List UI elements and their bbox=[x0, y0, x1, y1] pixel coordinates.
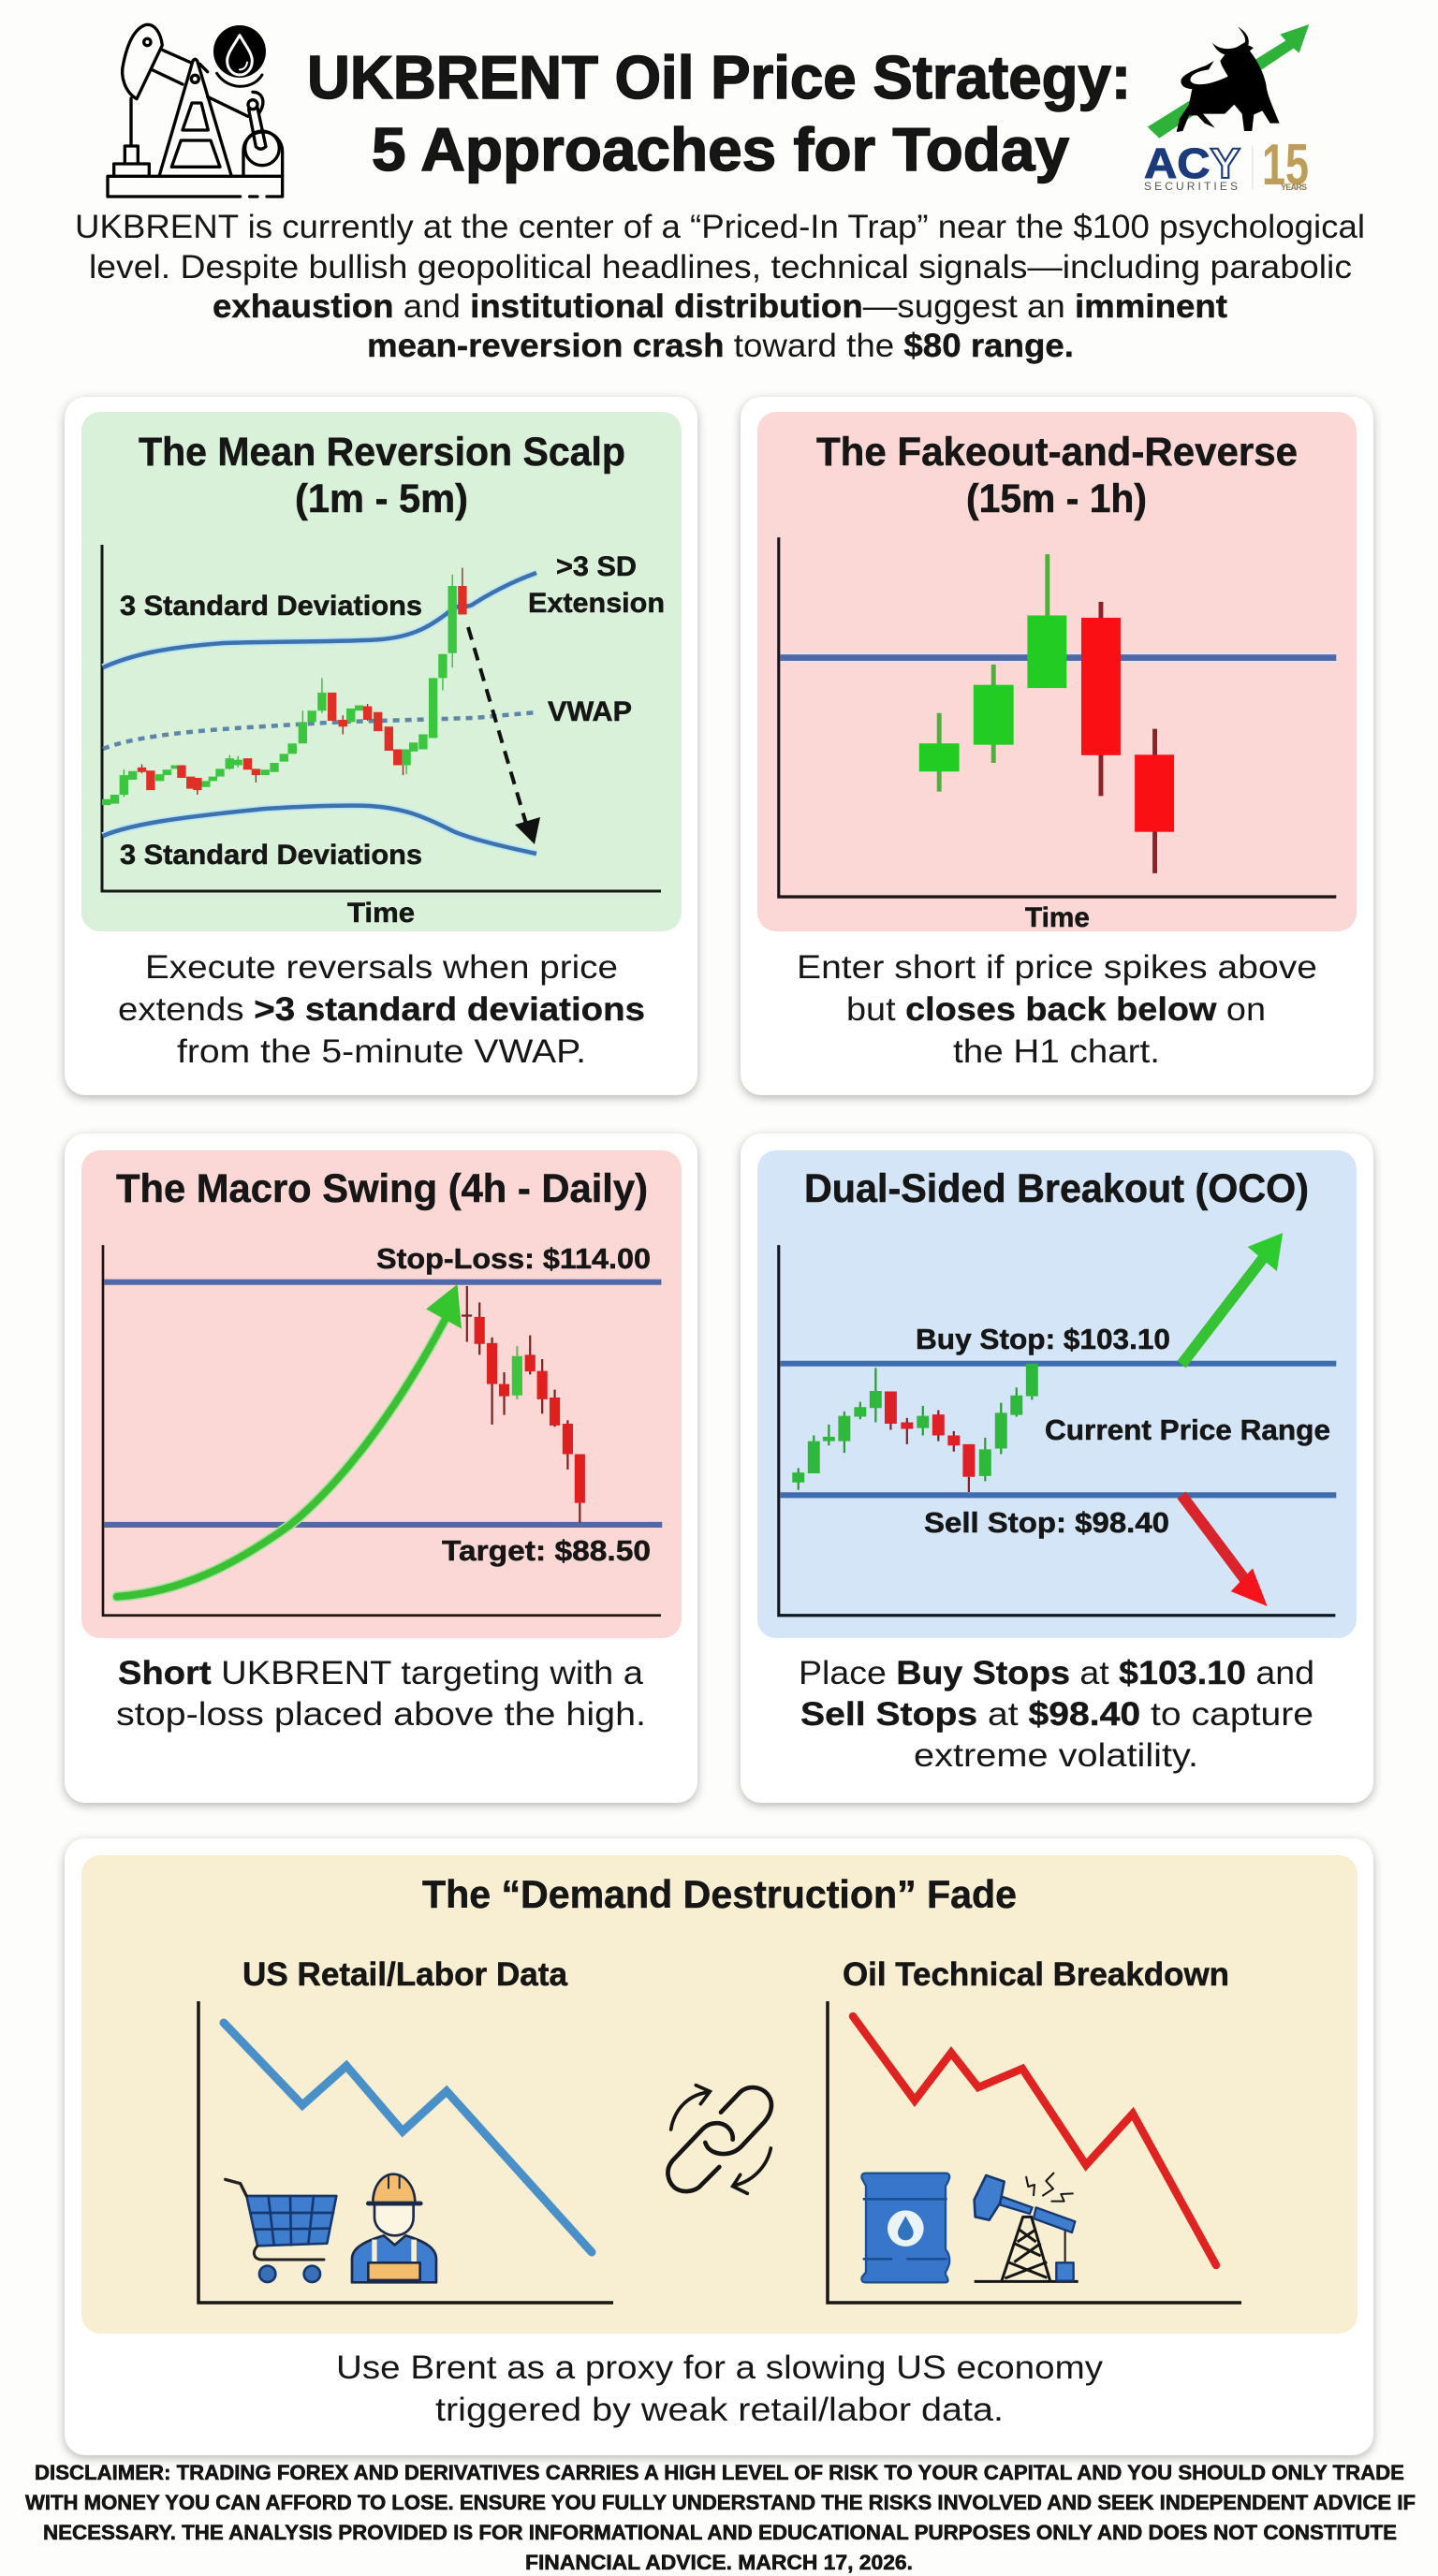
chart: oil technical breakdown bbox=[828, 2001, 1241, 2303]
description text: triggered by weak retail/labor data. bbox=[435, 2392, 1004, 2428]
heading: The Fakeout-and-Reverse bbox=[816, 430, 1298, 521]
title: UKBRENT Oil Price Strategy: bbox=[307, 43, 1131, 111]
logo: anniversary 15 years bbox=[1253, 133, 1309, 198]
icon: pumpjack with oil drop bbox=[108, 24, 283, 197]
description text: Place Buy Stops at $103.10 and bbox=[799, 1655, 1314, 1691]
candlesticks bbox=[107, 568, 462, 805]
heading: The Mean Reversion Scalp: The Mean Reversion Scalp bbox=[139, 430, 625, 475]
VWAP dotted line bbox=[103, 712, 536, 749]
description text: the H1 chart. bbox=[953, 1033, 1160, 1070]
heading: The Mean Reversion Scalp: (1m - 5m) bbox=[295, 476, 468, 521]
chart: VWAP bands with candlesticks bbox=[102, 545, 665, 929]
description text: but closes back below on bbox=[846, 991, 1266, 1028]
intro paragraph: exhaustion and institutional distribution —suggest an imminent bbox=[213, 288, 1227, 325]
label: >3 SD extension: >3 SD bbox=[556, 551, 637, 582]
heading: Dual-Sided Breakout: Dual-Sided Breakout (OCO) bbox=[804, 1166, 1309, 1211]
candlesticks bbox=[462, 1286, 580, 1523]
chart axes bbox=[102, 545, 661, 891]
icon: broken oil pump bbox=[975, 2173, 1078, 2281]
description text: Enter short if price spikes above bbox=[797, 949, 1317, 986]
description text bbox=[118, 949, 645, 1070]
label: time axis: Time bbox=[347, 898, 415, 929]
heading: Demand Destruction Fade: The “Demand Destruction” Fade bbox=[422, 1872, 1017, 1916]
logo text: ACY: ACY bbox=[1144, 139, 1240, 187]
chart background: red bbox=[757, 412, 1357, 931]
description text bbox=[799, 1655, 1314, 1774]
intro paragraph: level. Despite bullish geopolitical headlines, technical signals—including parabolic bbox=[89, 249, 1352, 285]
intro paragraph: mean-reversion crash toward the $80 range. bbox=[367, 328, 1074, 364]
sub-heading: Oil Technical Breakdown: Oil Technical Breakdown bbox=[843, 1956, 1229, 1993]
intro paragraph bbox=[75, 209, 1365, 364]
label: upper 3 standard deviations: 3 Standard Deviations bbox=[120, 591, 422, 622]
label: >3 SD extension: Extension bbox=[528, 588, 665, 619]
panel: The Macro Swing bbox=[65, 1134, 697, 1803]
title bbox=[307, 43, 1131, 183]
intro paragraph: UKBRENT is currently at the center of a “Priced-In Trap” near the $100 psychological bbox=[75, 209, 1365, 245]
lower 3 SD band bbox=[103, 806, 536, 854]
arrow: green up breakout bbox=[1181, 1233, 1283, 1365]
heading: The Macro Swing: The Macro Swing (4h - Daily) bbox=[116, 1166, 648, 1211]
buy stop level line bbox=[781, 1357, 1336, 1369]
description text: Short UKBRENT targeting with a bbox=[118, 1655, 644, 1691]
arrow: green parabolic rise bbox=[117, 1284, 462, 1597]
logo: anniversary 15 years: YEARS bbox=[1281, 183, 1307, 192]
candlesticks bbox=[799, 1364, 1032, 1492]
chart axes bbox=[779, 537, 1336, 897]
panel: The Demand Destruction Fade bbox=[65, 1838, 1373, 2455]
chart: US retail and labor decline bbox=[198, 2001, 613, 2303]
description text: Sell Stops at $98.40 to capture bbox=[800, 1696, 1313, 1733]
icon: link with cycle arrows bbox=[668, 2086, 771, 2193]
chart background: green bbox=[81, 412, 682, 931]
logo text: Securities: SECURITIES bbox=[1144, 180, 1238, 193]
arrow: dashed reversal to lower band bbox=[468, 627, 540, 844]
sub-heading: US Retail/Labor Data: US Retail/Labor Data bbox=[242, 1956, 568, 1993]
description text bbox=[797, 949, 1317, 1070]
panel: The Mean Reversion Scalp bbox=[65, 397, 697, 1095]
icon: shopping cart bbox=[226, 2179, 336, 2282]
heading: The Fakeout-and-Reverse: The Fakeout-and-Reverse bbox=[816, 430, 1298, 475]
chart axes bbox=[779, 1245, 1335, 1616]
description text: stop-loss placed above the high. bbox=[116, 1696, 646, 1733]
resistance level line bbox=[781, 652, 1336, 663]
chart: breakout range bbox=[779, 1233, 1336, 1616]
disclaimer: WITH MONEY YOU CAN AFFORD TO LOSE. ENSURE YOU FULLY UNDERSTAND THE RISKS INVOLVED AND SEEK INDEPENDENT ADVICE IF bbox=[25, 2491, 1416, 2514]
icon: construction worker bbox=[352, 2174, 436, 2282]
chart: fakeout candlesticks bbox=[779, 537, 1336, 897]
upper 3 SD band bbox=[103, 573, 536, 667]
label: current price range: Current Price Range bbox=[1045, 1413, 1330, 1446]
icon: green rising arrow bbox=[1148, 24, 1309, 139]
chart background: red bbox=[81, 1150, 682, 1638]
label: >3 SD extension bbox=[528, 551, 665, 619]
target level line bbox=[104, 1518, 662, 1530]
sell stop level line bbox=[781, 1489, 1336, 1501]
disclaimer: FINANCIAL ADVICE. MARCH 17, 2026. bbox=[525, 2551, 913, 2574]
description text bbox=[336, 2349, 1104, 2428]
candlesticks bbox=[919, 554, 1174, 873]
icon: oil barrel bbox=[861, 2174, 949, 2282]
logo: bull with green arrow and ACY Securities 15 years bbox=[1144, 24, 1309, 198]
label: lower 3 standard deviations: 3 Standard Deviations bbox=[120, 840, 422, 871]
panel: The Fakeout-and-Reverse bbox=[741, 397, 1373, 1095]
label: buy stop: Buy Stop: $103.10 bbox=[916, 1323, 1170, 1355]
arrow: red down breakdown bbox=[1181, 1495, 1268, 1606]
heading: The Fakeout-and-Reverse: (15m - 1h) bbox=[966, 476, 1147, 521]
icon: black bull bbox=[1177, 26, 1280, 132]
label: time axis: Time bbox=[1025, 902, 1090, 933]
label: target: Target: $88.50 bbox=[442, 1534, 651, 1567]
disclaimer bbox=[25, 2461, 1416, 2574]
chart axes bbox=[103, 1245, 661, 1616]
stop-loss level line bbox=[104, 1276, 661, 1288]
chart background: blue bbox=[757, 1150, 1357, 1638]
chart background: yellow bbox=[81, 1855, 1357, 2334]
disclaimer: DISCLAIMER: TRADING FOREX AND DERIVATIVES CARRIES A HIGH LEVEL OF RISK TO YOUR CAPITAL AND YOU SHOULD ONLY TRADE bbox=[35, 2461, 1404, 2484]
description text: Use Brent as a proxy for a slowing US economy bbox=[336, 2349, 1104, 2386]
chart: macro swing bbox=[103, 1242, 662, 1616]
description text: Execute reversals when price bbox=[145, 949, 618, 986]
heading: The Mean Reversion Scalp bbox=[139, 430, 625, 521]
logo: anniversary 15 years: 15 bbox=[1262, 133, 1309, 198]
label: stop-loss: Stop-Loss: $114.00 bbox=[376, 1242, 651, 1275]
description text bbox=[116, 1655, 646, 1733]
disclaimer: NECESSARY. THE ANALYSIS PROVIDED IS FOR INFORMATIONAL AND EDUCATIONAL PURPOSES ONLY AND DOES NOT CONSTITUTE bbox=[43, 2521, 1397, 2544]
description text: extends >3 standard deviations bbox=[118, 991, 645, 1028]
title: 5 Approaches for Today bbox=[372, 115, 1069, 183]
label: VWAP: VWAP bbox=[548, 696, 632, 727]
description text: from the 5-minute VWAP. bbox=[177, 1033, 586, 1070]
description text: extreme volatility. bbox=[914, 1737, 1198, 1774]
label: sell stop: Sell Stop: $98.40 bbox=[924, 1506, 1169, 1539]
panel: Dual-Sided Breakout (OCO) bbox=[741, 1134, 1373, 1803]
